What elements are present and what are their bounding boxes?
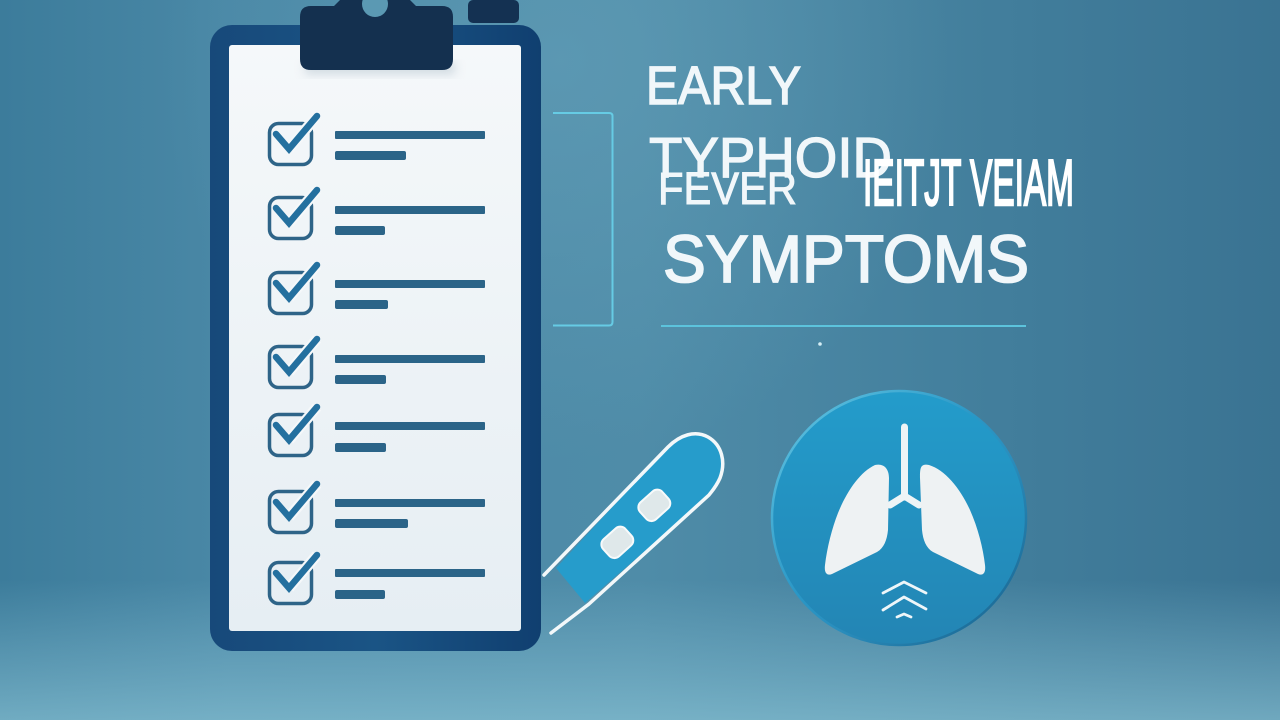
title line: FEVER: FEVER [658, 163, 797, 214]
title underline [661, 325, 1026, 327]
trachea [890, 427, 919, 505]
breath waves [883, 582, 926, 617]
checklist row 6 [270, 484, 485, 532]
left lung [825, 465, 889, 575]
checklist row 7 [270, 555, 485, 604]
title line: TYPHOID: TYPHOID [649, 126, 892, 190]
clip shadow [305, 62, 455, 74]
checklist row 2 [270, 190, 485, 238]
thermometer window upper [635, 487, 673, 524]
thermometer window lower [598, 524, 636, 561]
clipboard clip [300, 0, 519, 70]
checklist row 5 [270, 407, 485, 456]
small dot [818, 342, 822, 346]
title line: SYMPTOMS: SYMPTOMS [663, 222, 1029, 297]
title [646, 56, 1074, 297]
bracket connector [553, 113, 612, 326]
checklist row 3 [270, 265, 485, 314]
title line: EARLY: EARLY [646, 56, 801, 116]
badge disc [772, 391, 1026, 645]
right lung [920, 465, 985, 575]
icon: lungs badge [772, 391, 1026, 645]
clipboard paper [229, 45, 521, 631]
checklist row 4 [270, 339, 485, 388]
clipboard board [210, 25, 541, 651]
checklist row 1 [270, 116, 485, 164]
clipboard with checklist [210, 0, 541, 651]
icon: thermometer [544, 434, 723, 633]
title line: garbled text: IEITJT VEIAM [863, 146, 1074, 219]
